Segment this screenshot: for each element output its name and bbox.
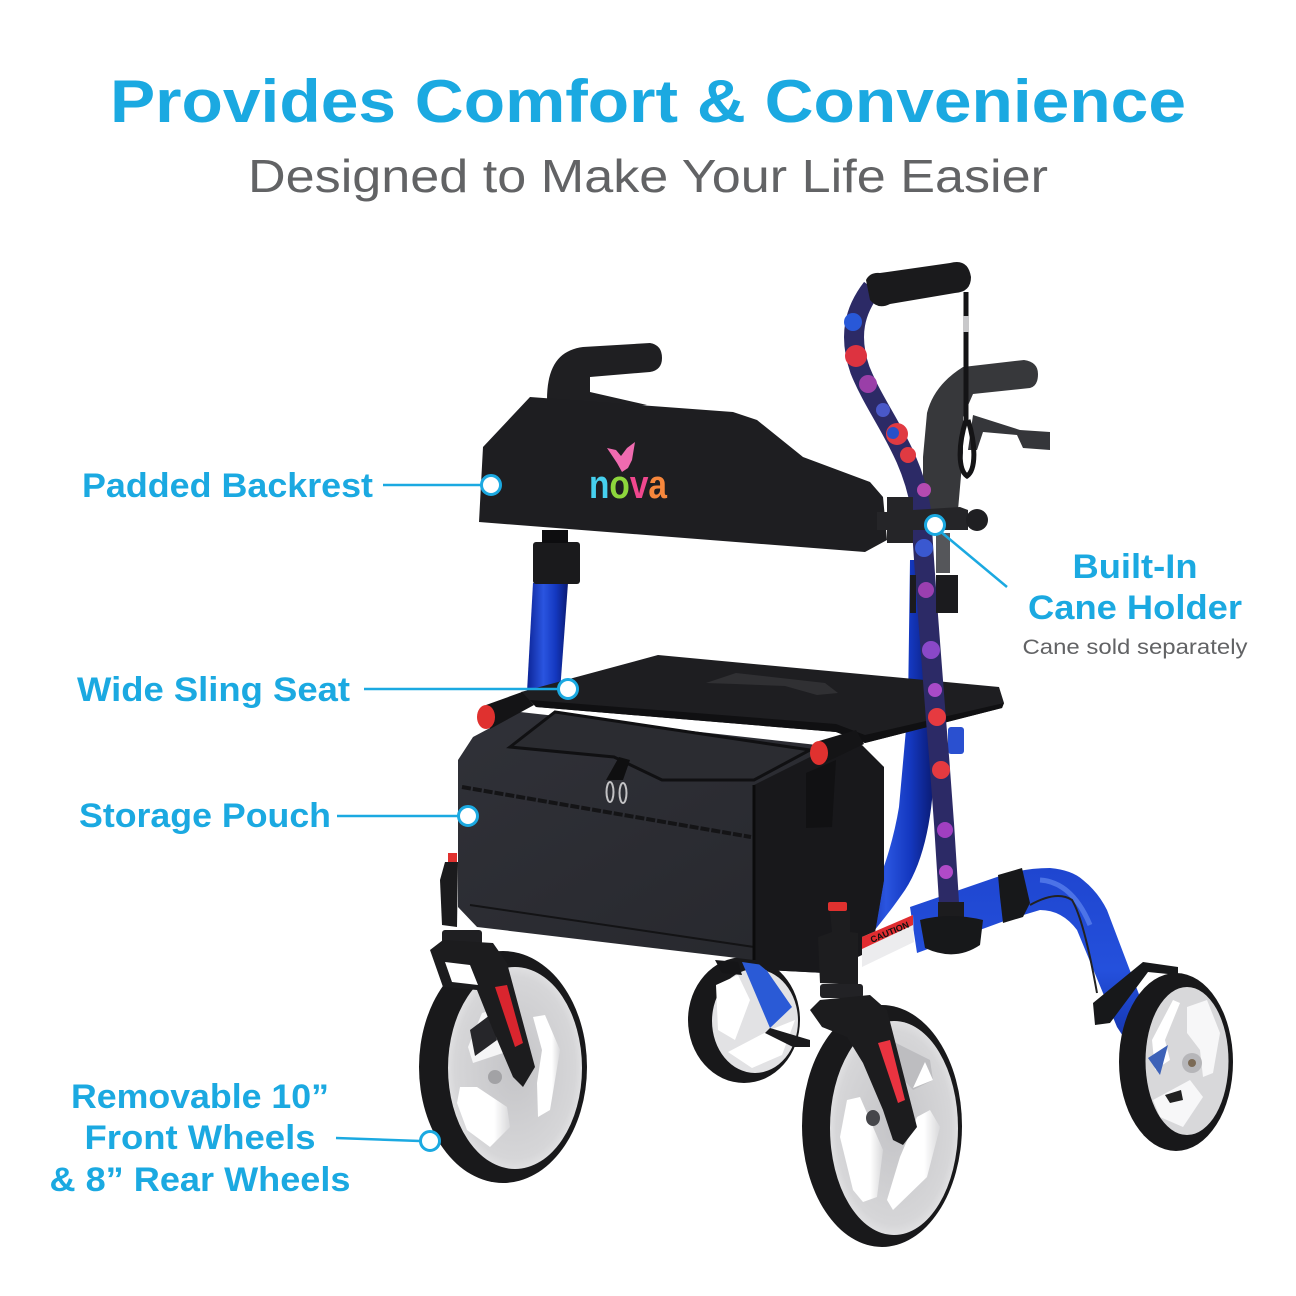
right caster fork: [810, 995, 917, 1145]
callout: storage pouch: Storage Pouch: [79, 797, 331, 835]
right rear leg: [910, 868, 1178, 1073]
right handle and brake lever: [923, 360, 1050, 510]
cane grip: [866, 262, 971, 306]
pouch lid: [510, 712, 810, 780]
callout: cane holder: Cane sold separately: [1022, 635, 1248, 659]
pouch side panel: [754, 745, 884, 973]
front left wheel: [419, 853, 587, 1183]
front right wheel: [802, 995, 962, 1247]
tube clamp: [998, 868, 1030, 923]
callout: storage pouch: [79, 797, 478, 835]
zipper pulls: [606, 757, 630, 803]
callout: padded backrest: Padded Backrest: [82, 467, 373, 505]
title: Provides Comfort & Convenience: [110, 68, 1186, 135]
nova logo: [589, 442, 668, 507]
subtitle: Designed to Make Your Life Easier: [248, 150, 1048, 202]
red reflector caps: [477, 692, 864, 765]
callout: cane holder: Built-In: [1072, 548, 1198, 586]
cane cup: [920, 902, 983, 954]
callout: padded backrest: [82, 467, 500, 505]
rear brake: [1093, 962, 1178, 1025]
callout: wheels: & 8” Rear Wheels: [50, 1161, 350, 1199]
left handle: [547, 343, 662, 410]
velcro strap: [806, 760, 836, 828]
storage pouch: [458, 712, 884, 973]
floral cane: [844, 262, 974, 903]
padded backrest: [479, 397, 887, 552]
left caster fork and housing: [430, 853, 535, 1087]
callout: wide sling seat: Wide Sling Seat: [77, 671, 350, 709]
brake cable: [1030, 896, 1097, 993]
backrest post: [527, 530, 580, 692]
nova logo: nova: [589, 463, 668, 507]
callout: wide sling seat: [77, 671, 578, 709]
seat handle: [706, 673, 838, 695]
rollator illustration: [419, 262, 1233, 1247]
wrist strap: [960, 292, 974, 476]
callout: cane holder: Cane Holder: [1028, 589, 1242, 627]
blue bracket: [948, 727, 964, 754]
main blue side frame: [854, 560, 934, 945]
callout: wheels: [50, 1078, 440, 1199]
callout: wheels: Front Wheels: [84, 1119, 316, 1157]
callout: wheels: Removable 10”: [71, 1078, 329, 1116]
caution label and right joint: CAUTION: [869, 920, 911, 945]
far rear wheel: [688, 957, 810, 1083]
caution label and right joint: [818, 902, 914, 998]
callout: cane holder: [926, 516, 1248, 659]
rear right wheel: [1119, 973, 1233, 1151]
cane holder clamp: [877, 497, 988, 613]
sling seat: [477, 655, 1004, 765]
